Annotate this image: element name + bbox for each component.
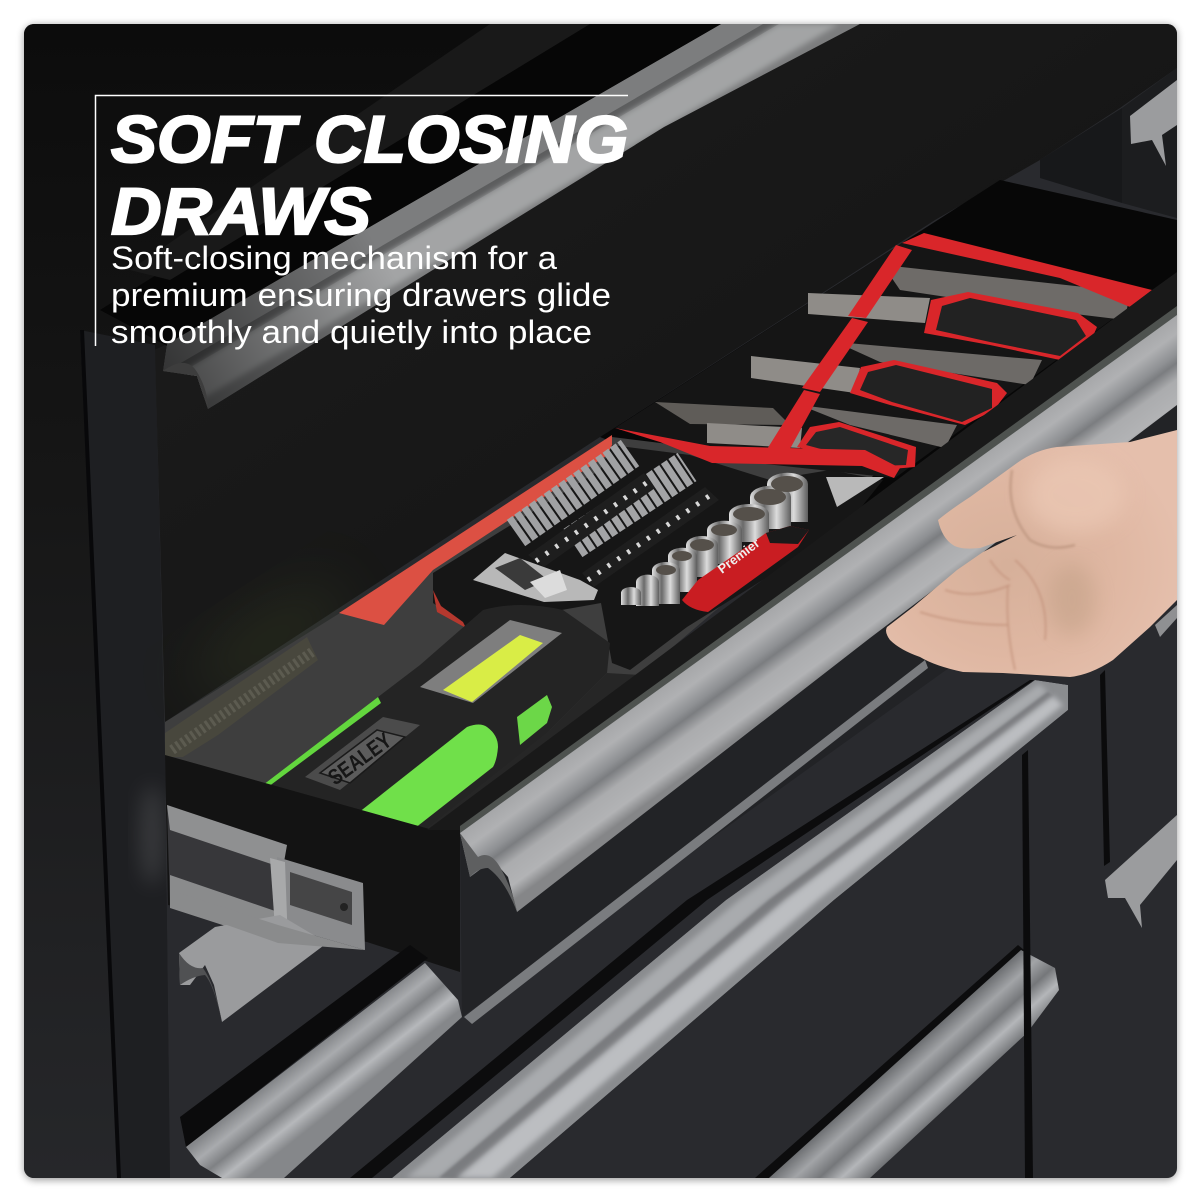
work light <box>263 605 610 832</box>
description: Soft-closing mechanism for a <box>111 240 557 276</box>
runner rail overlap <box>170 890 365 950</box>
inner drawer wall band <box>427 272 1177 830</box>
upper handle <box>163 24 860 409</box>
chrome sockets <box>621 473 808 606</box>
drawer runner rail <box>167 805 365 950</box>
description <box>111 240 611 350</box>
lower left handle groove <box>180 945 428 1147</box>
thin strip under drawer <box>464 660 928 1024</box>
grey lip <box>460 306 1177 833</box>
roll straps and binding <box>902 233 1152 307</box>
open drawer handle <box>460 315 1177 912</box>
faint band above recess <box>130 24 590 280</box>
bit holder set <box>516 453 719 587</box>
drawer inner back shadow <box>600 180 1177 540</box>
hand <box>886 430 1177 677</box>
drawer floor <box>165 437 874 783</box>
plier handle one <box>924 292 1097 360</box>
red screwdriver <box>682 526 809 612</box>
mini ratchet <box>473 553 598 602</box>
plier handle three <box>797 422 916 470</box>
cabinet left frame <box>24 24 721 1178</box>
bottom handle <box>769 950 1059 1178</box>
zipped pouch <box>165 637 318 757</box>
dark recess above upper handle <box>100 118 556 346</box>
socket tray <box>433 445 883 670</box>
open drawer side wall <box>165 755 460 972</box>
headline: SOFT CLOSING <box>111 102 628 176</box>
Sealey label: SEALEY <box>323 727 396 790</box>
second lower handle <box>392 680 1068 1178</box>
screwdriver brand: Premier <box>715 535 762 576</box>
right side handles <box>1105 605 1177 928</box>
lower left long handle <box>186 963 462 1178</box>
description: premium ensuring drawers glide <box>111 277 611 313</box>
tool roll: red pouch <box>615 233 1152 478</box>
dark area beside torch <box>427 673 636 828</box>
cabinet lower right dividers <box>1022 670 1110 1178</box>
description: smoothly and quietly into place <box>111 314 592 350</box>
mid handle groove <box>350 680 1034 1178</box>
headline frame <box>96 96 628 346</box>
plier handle two <box>850 360 1007 425</box>
grey insert corner <box>826 477 884 507</box>
red foam tray <box>339 435 612 625</box>
headline <box>111 102 628 248</box>
bottom handle groove <box>755 945 1024 1178</box>
plier metal backgrounds <box>655 265 1130 448</box>
tray red edge <box>433 590 466 628</box>
right cabinet drawers <box>1040 68 1177 218</box>
upper drawer front <box>155 24 1177 722</box>
lower left stub handle <box>179 915 327 1022</box>
open drawer front panel <box>460 668 948 1016</box>
headline: DRAWS <box>111 174 371 248</box>
green reflection on upper drawer <box>220 600 322 678</box>
